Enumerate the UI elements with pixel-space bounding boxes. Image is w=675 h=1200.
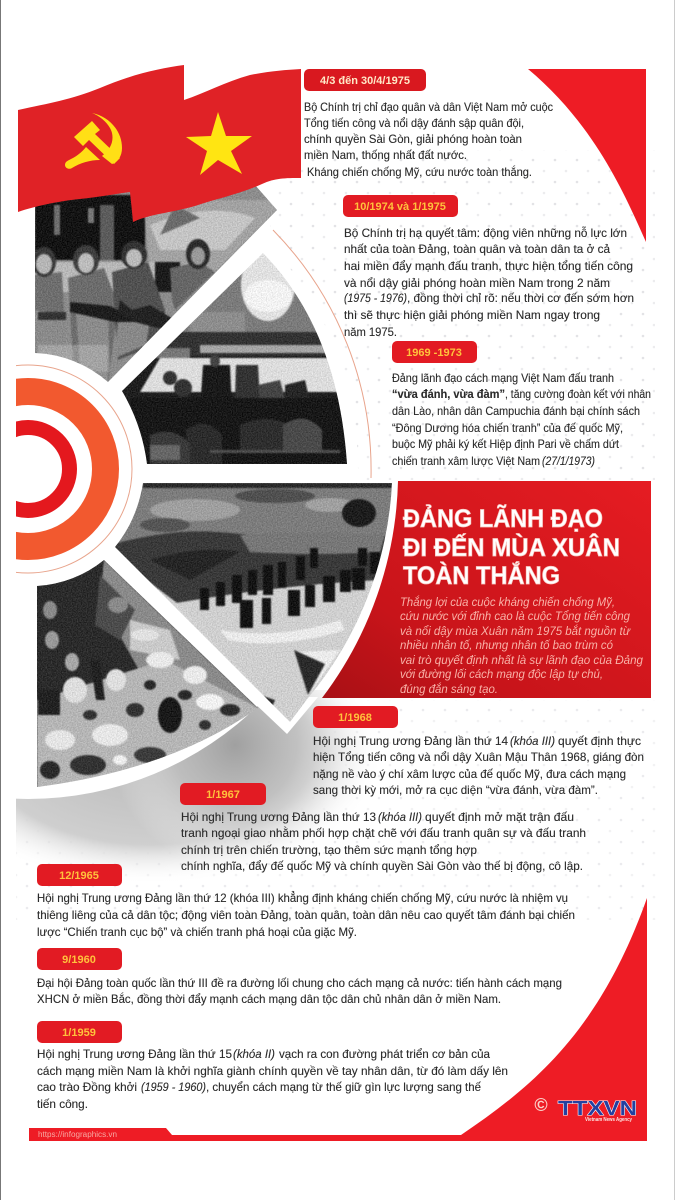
event 1/1968 [313, 706, 644, 797]
description: vạch ra con đường phát triển cơ bản của [279, 1047, 490, 1061]
description: Hội nghị Trung ương Đảng lần thứ 15 [37, 1047, 232, 1061]
description: Kháng chiến chống Mỹ, cứu nước toàn thắng. [307, 164, 532, 179]
date badge [37, 948, 122, 970]
date badge: 1/1968 [338, 712, 372, 724]
description [344, 225, 634, 339]
photo: crowd [37, 560, 258, 787]
description: nhất của toàn Đảng, toàn quân và toàn dân ta ở cả [344, 242, 610, 256]
photo: soldiers and tank [35, 186, 277, 382]
description: Hội nghị Trung ương Đảng lần thứ 12 (khóa III) khẳng định kháng chiến chống Mỹ, cứu nước là nhiệm vụ [37, 890, 568, 905]
description: tiến công. [37, 1097, 88, 1111]
description: (27/1/1973) [542, 454, 595, 468]
icon: gold star [186, 112, 252, 175]
thin arc around wheel [273, 230, 371, 478]
intro paragraph: và nổi dậy mùa Xuân năm 1975 bắt nguồn từ [400, 625, 631, 638]
intro paragraph [400, 596, 644, 696]
description: và nổi dậy giải phóng hoàn miền Nam trong 2 năm [344, 276, 610, 290]
date badge [37, 1021, 122, 1043]
date badge: 1/1959 [62, 1027, 96, 1039]
description: tranh ngoại giao nhằm phối hợp chặt chẽ với đấu tranh quân sự và đấu tranh [181, 825, 586, 840]
description [37, 976, 562, 1006]
date badge [304, 69, 426, 91]
description [37, 1047, 508, 1111]
logo: TTXVN [534, 1095, 637, 1123]
description: hiện Tổng tiến công và nổi dậy Xuân Mậu Thân 1968, giáng đòn [313, 750, 644, 764]
title: ĐI ĐẾN MÙA XUÂN [403, 532, 620, 562]
date badge: 4/3 đến 30/4/1975 [320, 75, 410, 87]
description: Hội nghị Trung ương Đảng lần thứ 14 [313, 734, 508, 748]
description: thì sẽ thực hiện giải phóng miền Nam ngay trong [344, 308, 600, 322]
flag [18, 65, 301, 222]
date badge [313, 706, 398, 728]
description: cách mạng miền Nam là khởi nghĩa giành chính quyền về tay nhân dân, từ đó làm dấy lên [37, 1064, 508, 1078]
description: (khóa II) [233, 1047, 275, 1061]
date badge [180, 783, 266, 805]
dotted background [16, 150, 656, 920]
event 4/3 to 30/4/1975 [304, 69, 553, 179]
description: (khóa III) [510, 734, 555, 748]
description: “Đông Dương hóa chiến tranh” của đế quốc Mỹ, [392, 421, 623, 435]
intro paragraph: nhiều nhân tố, nhưng nhân tố bao trùm có [400, 640, 614, 652]
description: chính trị trên chiến trường, tạo thêm sức mạnh tổng hợp [181, 843, 477, 857]
intro paragraph: cứu nước với đỉnh cao là cuộc Tổng tiến công [400, 611, 631, 623]
description: Đảng lãnh đạo cách mạng Việt Nam đấu tranh [392, 371, 614, 385]
description: chiến tranh xâm lược Việt Nam [392, 454, 540, 468]
description [392, 371, 651, 468]
description: năm 1975. [344, 325, 397, 339]
date badge: 1969 -1973 [406, 347, 462, 359]
description: cao trào Đồng khởi [37, 1080, 137, 1094]
description: Tổng tiến công và nổi dậy đánh sập quân đội, [304, 116, 524, 130]
concentric target rings [16, 364, 132, 574]
gray shaded backdrop [16, 690, 356, 868]
source url: https://infographics.vn [38, 1130, 117, 1139]
date badge [343, 195, 458, 217]
description [304, 100, 553, 179]
description: dân Lào, nhân dân Campuchia đánh bại chính sách [392, 404, 640, 418]
description: lược “Chiến tranh cục bộ” và chiến tranh phá hoại của giặc Mỹ. [37, 925, 357, 939]
description [313, 734, 644, 797]
event 1969-1973 [392, 341, 651, 468]
description: chính nghĩa, đẩy đế quốc Mỹ và chính quyền Sài Gòn vào thế bị động, cô lập. [181, 859, 583, 873]
description: , chuyển cách mạng từ thế giữ gìn lực lượng sang thế [206, 1080, 481, 1094]
description: chính quyền Sài Gòn, giải phóng hoàn toàn [304, 132, 522, 146]
date badge: 9/1960 [62, 954, 96, 966]
event 1/1959 [37, 1021, 508, 1111]
description: (1959 - 1960) [141, 1080, 206, 1094]
event 12/1965 [37, 864, 575, 939]
title [403, 503, 620, 590]
photo: Paris conference [120, 249, 350, 466]
logo: TTXVN: © [534, 1095, 548, 1115]
description: , tăng cường đoàn kết với nhân [505, 387, 651, 401]
description: buộc Mỹ phải ký kết Hiệp định Pari về chấm dứt [392, 437, 620, 451]
date badge: 12/1965 [59, 870, 99, 882]
date badge [392, 341, 477, 363]
top right red corner [528, 69, 646, 242]
description: quyết định thực [558, 734, 641, 748]
bottom right red corner and footer bar [29, 898, 647, 1141]
description: hai miền đẩy mạnh đấu tranh, thực hiện tổng tiến công [344, 259, 633, 273]
description: Bộ Chính trị chỉ đạo quân và dân Việt Nam mở cuộc [304, 100, 553, 114]
date badge: 10/1974 và 1/1975 [354, 201, 446, 213]
intro paragraph: vai trò quyết định nhất là sự lãnh đạo của Đảng [400, 655, 644, 667]
description: thiêng liêng của cả dân tộc; động viên toàn Đảng, toàn quân, toàn dân nêu cao quyết tâm đánh bại chiến [37, 908, 575, 922]
event 1/1967 [180, 783, 586, 873]
description: miền Nam, thống nhất đất nước. [304, 148, 467, 162]
description: (1975 - 1976) [344, 291, 407, 305]
description: Đại hội Đảng toàn quốc lần thứ III đề ra đường lối chung cho cách mạng cả nước: tiến hành cách mạng [37, 976, 562, 990]
event 10/1974 and 1/1975 [343, 195, 634, 339]
description: (khóa III) [378, 810, 422, 824]
description: Bộ Chính trị hạ quyết tâm: động viên những nỗ lực lớn [344, 225, 627, 240]
logo: TTXVN: Vietnam News Agency [585, 1117, 632, 1123]
description: , đồng thời chỉ rõ: nếu thời cơ đến sớm hơn [407, 291, 634, 305]
panel: title [322, 481, 651, 698]
event 9/1960 [37, 948, 562, 1006]
title: TOÀN THẮNG [403, 560, 560, 590]
description: quyết định mở mặt trận đấu [425, 810, 574, 824]
description: sang thời kỳ mới, mở ra cục diện “vừa đánh, vừa đàm”. [313, 783, 598, 797]
description: “vừa đánh, vừa đàm” [392, 387, 505, 401]
intro paragraph: Thắng lợi của cuộc kháng chiến chống Mỹ, [400, 596, 615, 609]
title: ĐẢNG LÃNH ĐẠO [403, 503, 603, 533]
photo: soldiers crossing river [110, 480, 400, 725]
date badge: 1/1967 [206, 789, 240, 801]
white photo wheel [0, 130, 358, 810]
intro paragraph: đúng đắn sáng tạo. [400, 683, 498, 696]
description: nặng nề vào ý chí xâm lược của đế quốc Mỹ, đưa cách mạng [313, 767, 626, 781]
description: XHCN ở miền Bắc, đồng thời đẩy mạnh cách mạng dân tộc dân chủ nhân dân ở miền Nam. [37, 991, 501, 1006]
intro paragraph: với đường lối cách mạng độc lập tự chủ, [400, 669, 603, 681]
description [37, 890, 575, 939]
icon: hammer and sickle [65, 113, 122, 169]
logo: TTXVN: TTXVN [558, 1098, 637, 1120]
description: Hội nghị Trung ương Đảng lần thứ 13 [181, 810, 376, 824]
date badge [37, 864, 122, 886]
description [181, 810, 586, 873]
